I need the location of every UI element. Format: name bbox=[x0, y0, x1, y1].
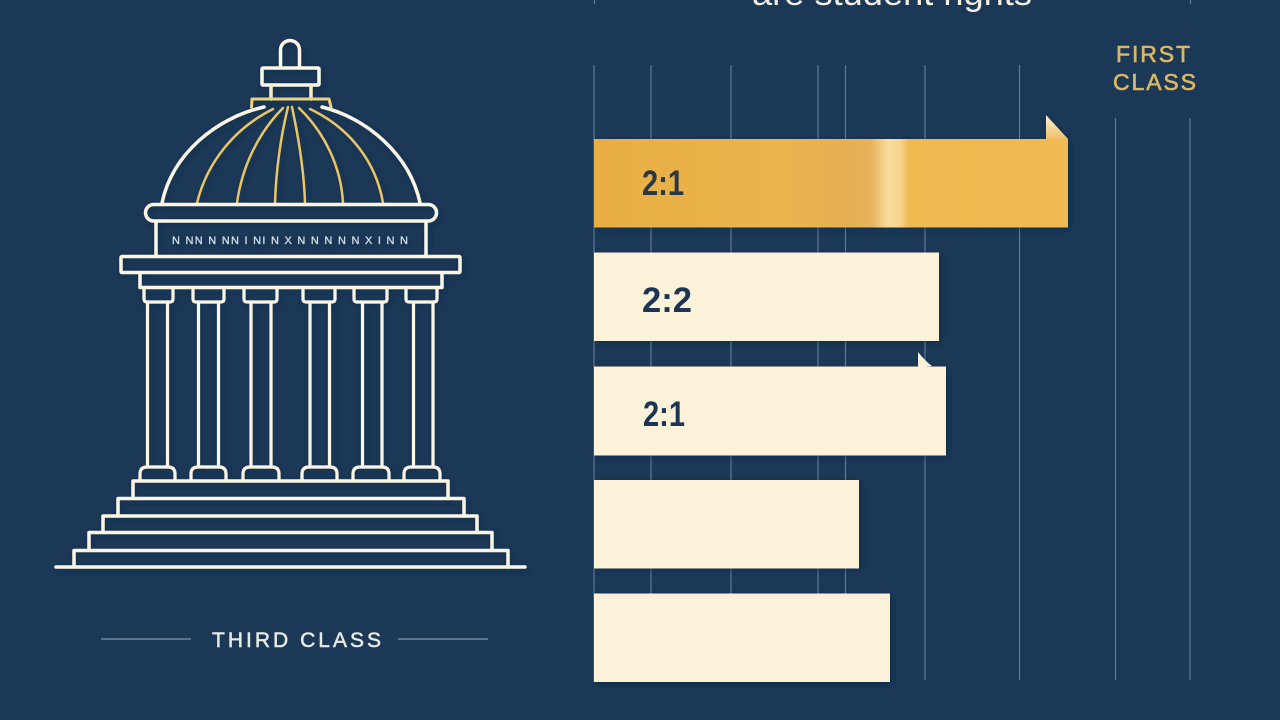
column 4 bbox=[302, 288, 337, 480]
finial bbox=[262, 40, 319, 99]
frieze lettering: N NN N NN I NI N X N N N N N X I N N bbox=[172, 235, 408, 247]
first class label: FIRST bbox=[1116, 41, 1190, 67]
dome outline bbox=[162, 107, 264, 203]
steps bbox=[56, 481, 525, 567]
building illustration bbox=[56, 40, 525, 567]
column 6 bbox=[404, 288, 440, 480]
chart gridlines bbox=[594, 0, 1190, 682]
first class label bbox=[1113, 41, 1196, 95]
first class label: CLASS bbox=[1113, 69, 1196, 95]
dome ribs bbox=[197, 107, 383, 203]
column 3 bbox=[243, 288, 279, 480]
cornice bbox=[146, 204, 436, 221]
bar 3: 2:1 bbox=[643, 395, 685, 434]
third class caption: THIRD CLASS bbox=[212, 629, 381, 652]
column 2 bbox=[191, 288, 226, 480]
column 5 bbox=[353, 288, 389, 480]
column 1 bbox=[140, 288, 175, 480]
bar 1: gold bbox=[594, 115, 1068, 228]
bar 2 bbox=[594, 252, 939, 341]
frieze bbox=[156, 222, 426, 256]
bar 4 bbox=[594, 480, 859, 568]
bar 3 bbox=[594, 352, 946, 456]
gold dome collar bbox=[252, 99, 331, 107]
bar 5 bbox=[594, 594, 890, 682]
bar 1: gold: 2:1 bbox=[642, 164, 684, 203]
bar 2: 2:2 bbox=[642, 281, 692, 320]
entablature bbox=[121, 256, 460, 272]
columns bbox=[140, 288, 440, 480]
